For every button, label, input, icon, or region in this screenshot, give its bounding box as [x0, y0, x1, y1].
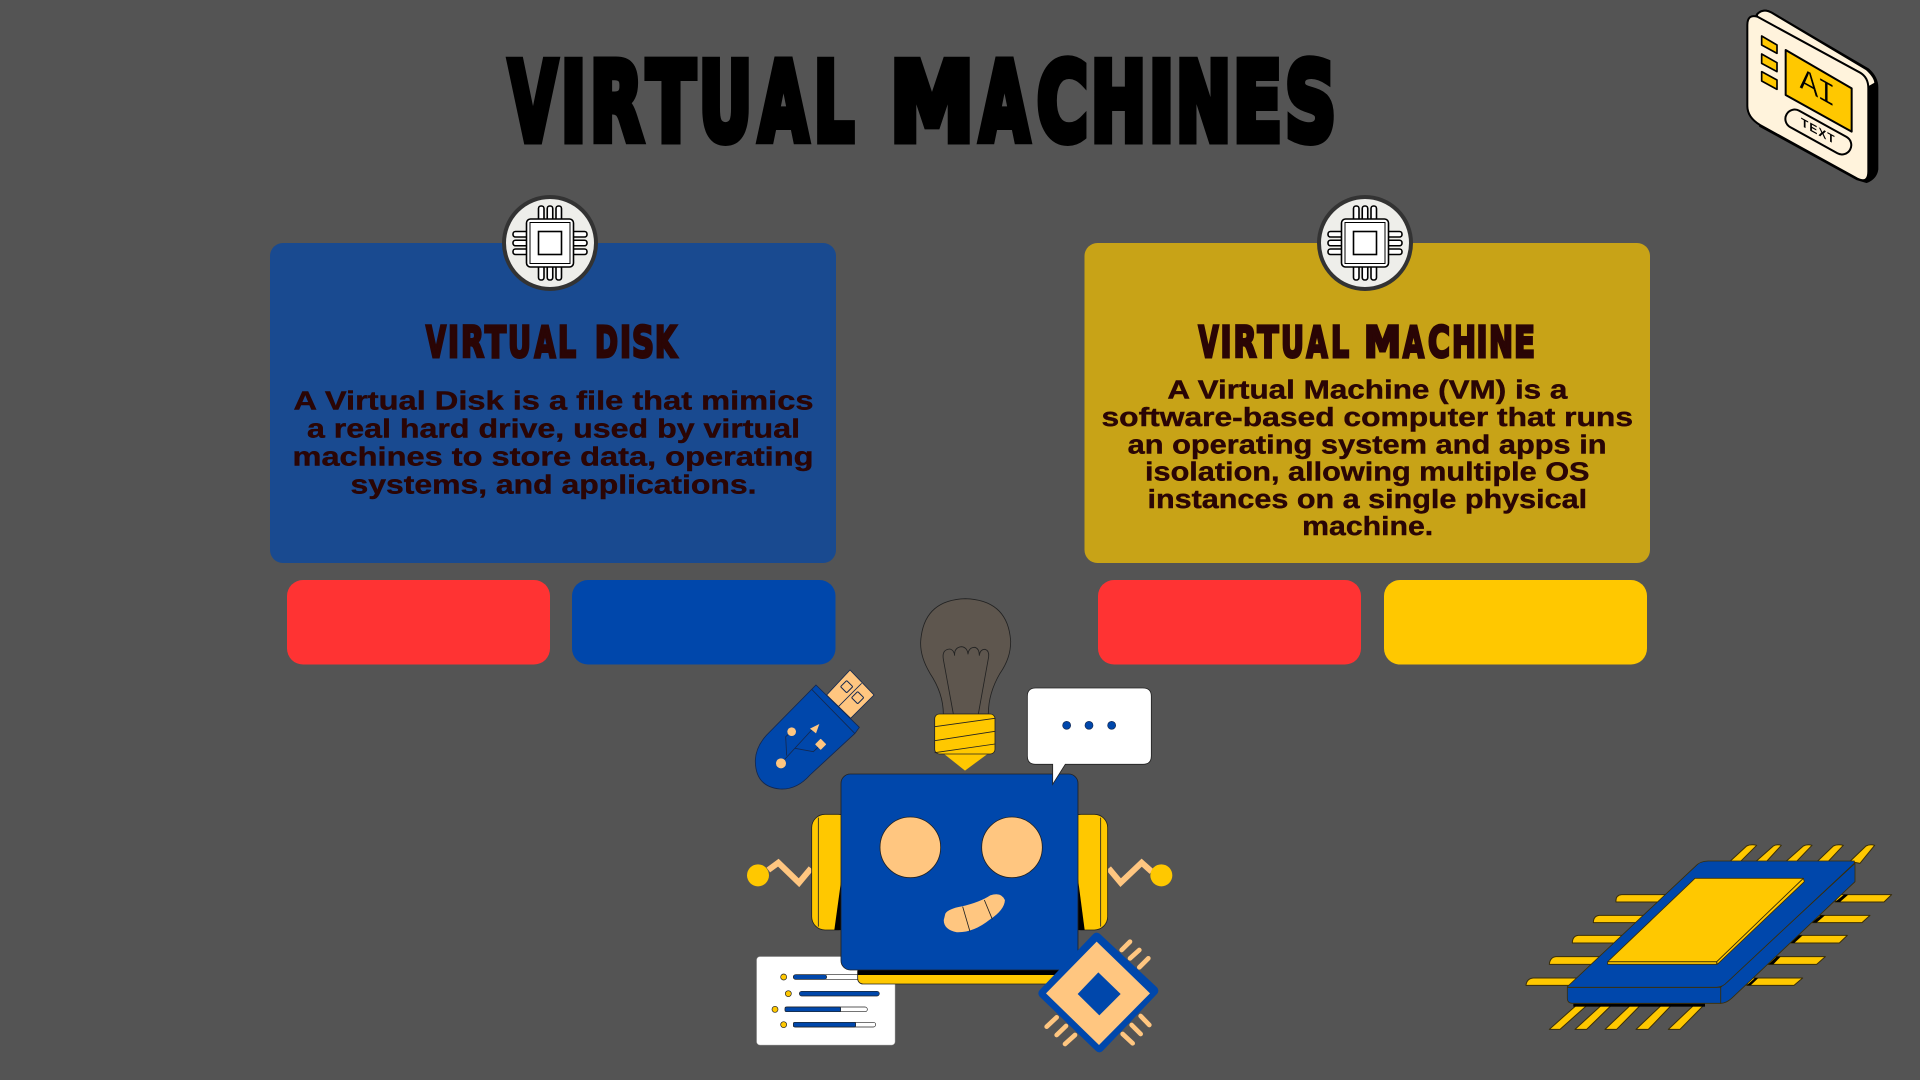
title: A [759, 41, 808, 166]
chip top plate [1608, 878, 1804, 964]
description text: A Virtual Disk is a file that mimics [294, 387, 814, 415]
icon: USB drive [755, 670, 874, 789]
description text: a real hard drive, used by virtual [307, 415, 800, 443]
illustration: robot group [747, 599, 1172, 1048]
panel: virtual disk [270, 197, 836, 563]
robot head [841, 774, 1078, 970]
title: L [814, 41, 854, 166]
heading: virtual machine: U [1281, 318, 1304, 368]
description text: an operating system and apps in [1128, 431, 1607, 459]
heading: virtual machine: A [1306, 318, 1328, 368]
robot eyes [880, 817, 1042, 878]
title: H [1091, 41, 1146, 166]
icon: AI text card: TEXT [1801, 114, 1836, 148]
description text: A Virtual Machine (VM) is a [1167, 377, 1568, 405]
heading: virtual machine: I [1476, 318, 1488, 368]
icon: chip badge [1319, 197, 1411, 289]
title: E [1233, 41, 1282, 166]
heading: virtual machine: A [1403, 318, 1424, 368]
blue button [572, 580, 836, 664]
description text: isolation, allowing multiple OS [1145, 459, 1590, 487]
robot mouth [943, 894, 1005, 933]
title: T [647, 41, 695, 166]
card background [270, 243, 836, 563]
heading: virtual disk: I [620, 318, 631, 368]
chip pins [1526, 845, 1892, 1029]
title: I [1149, 41, 1174, 166]
white slider panel [757, 957, 895, 1045]
heading: virtual disk: I [448, 318, 459, 368]
pin shadows [1573, 895, 1848, 1007]
heading: virtual disk: R [461, 318, 484, 368]
description text: systems, and applications. [350, 471, 756, 499]
icon: AI text card: AI [1799, 61, 1836, 118]
heading: virtual machine: H [1452, 318, 1476, 368]
description text: software-based computer that runs [1102, 404, 1633, 432]
heading: virtual machine: T [1258, 318, 1279, 368]
title: V [509, 41, 557, 166]
title: M [890, 41, 974, 166]
heading: virtual machine: I [1220, 318, 1232, 368]
title: N [1176, 41, 1231, 166]
heading: virtual disk: T [485, 318, 506, 368]
description text: instances on a single physical [1148, 486, 1587, 514]
heading: virtual disk: V [426, 318, 446, 368]
heading: virtual disk: L [558, 318, 576, 368]
icon: chip badge [504, 197, 596, 289]
heading: virtual disk: K [655, 318, 678, 368]
chip body [1567, 861, 1855, 1003]
heading: virtual machine: M [1364, 318, 1401, 368]
red button left [287, 580, 550, 664]
heading: virtual machine: N [1489, 318, 1513, 368]
card background [1084, 243, 1650, 563]
panel: virtual machine [1084, 197, 1650, 563]
title: I [561, 41, 586, 166]
heading: virtual disk: A [534, 318, 556, 368]
heading: virtual machine: L [1331, 318, 1349, 368]
title: U [699, 41, 752, 166]
robot [747, 774, 1172, 1048]
title: S [1285, 41, 1336, 166]
heading: virtual machine: E [1514, 318, 1535, 368]
robot wires and antenna balls [747, 863, 1172, 886]
heading: virtual disk: S [632, 318, 654, 368]
description text: machine. [1302, 513, 1433, 541]
title: C [1037, 41, 1088, 166]
icon: small chip [1043, 937, 1154, 1048]
heading: virtual machine: R [1234, 318, 1256, 368]
yellow button [1384, 580, 1647, 664]
heading: virtual disk: D [595, 318, 618, 368]
title: R [590, 41, 643, 166]
title: A [980, 41, 1029, 166]
icon: AI text card [1747, 11, 1877, 182]
description text: machines to store data, operating [292, 443, 814, 471]
heading: virtual disk: U [508, 318, 531, 368]
robot neck bar [858, 967, 1063, 984]
robot ears [812, 814, 1108, 930]
heading: virtual machine: C [1428, 318, 1450, 368]
heading: virtual machine: V [1198, 318, 1219, 368]
icon: light bulb [921, 599, 1011, 771]
speech bubble [1027, 688, 1151, 784]
red button right [1098, 580, 1361, 664]
icon: large isometric chip [1526, 845, 1892, 1029]
